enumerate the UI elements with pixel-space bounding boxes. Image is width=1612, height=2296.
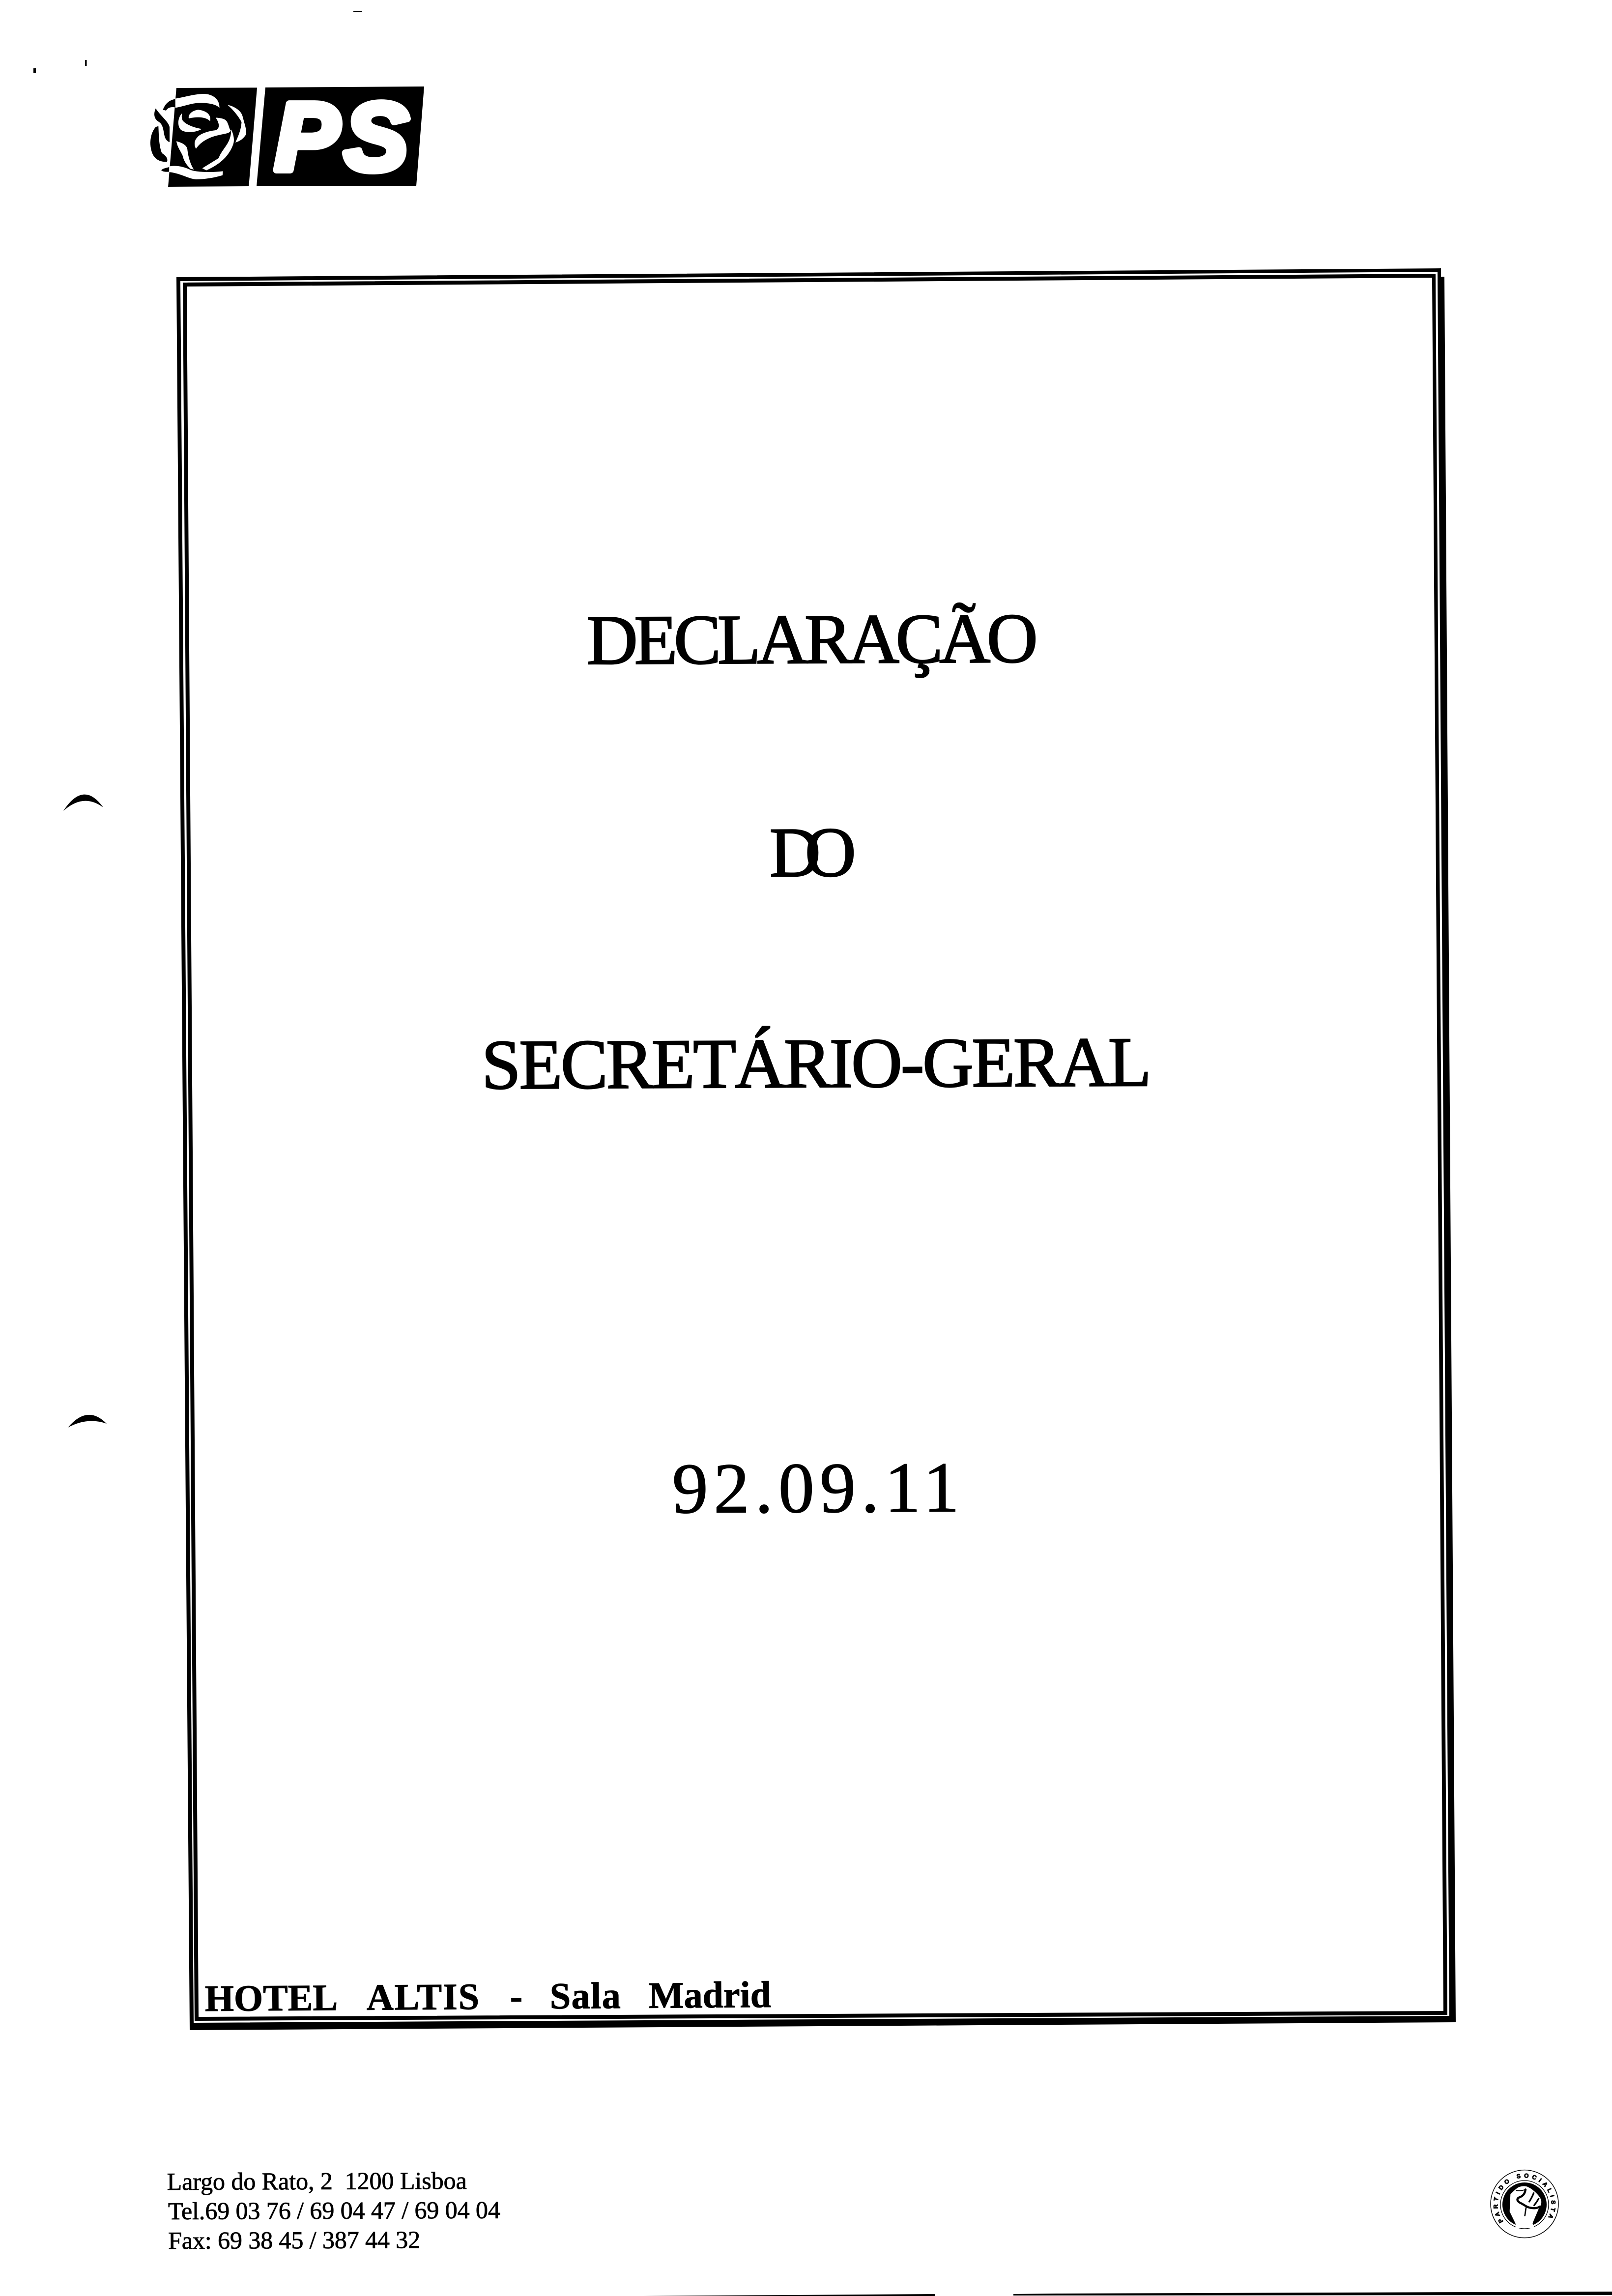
title line 2: DO <box>769 813 856 892</box>
double-line page frame <box>176 268 1456 2030</box>
punch hole mark lower <box>68 1415 107 1428</box>
title line 1: DECLARAÇÃO <box>586 600 1038 680</box>
venue label: Sala <box>550 1975 621 2017</box>
icon: rose <box>150 87 257 187</box>
address line: Largo do Rato, 2 1200 Lisboa <box>167 2167 467 2195</box>
PS black box <box>257 86 424 186</box>
icon: Partido Socialista fist emblem <box>1490 2169 1559 2238</box>
venue label: Madrid <box>649 1974 771 2016</box>
PS wordmark: PS <box>275 83 408 191</box>
telephone line: Tel.69 03 76 / 69 04 47 / 69 04 04 <box>168 2196 500 2225</box>
date: 92.09.11 <box>672 1447 959 1528</box>
venue label: - <box>510 1976 522 2017</box>
venue label: HOTEL <box>205 1977 338 2019</box>
punch hole mark upper <box>63 795 103 811</box>
scan edge line at the bottom <box>644 2292 1612 2296</box>
scan specks <box>33 11 362 73</box>
fax line: Fax: 69 38 45 / 387 44 32 <box>168 2226 420 2254</box>
title line 3: SECRETÁRIO-GERAL <box>481 1023 1151 1104</box>
footer address <box>167 2167 500 2254</box>
emblem lettering: PARTIDO SOCIALISTA <box>1493 2173 1556 2224</box>
venue label: ALTIS <box>367 1976 480 2018</box>
PS party logo <box>150 83 424 191</box>
